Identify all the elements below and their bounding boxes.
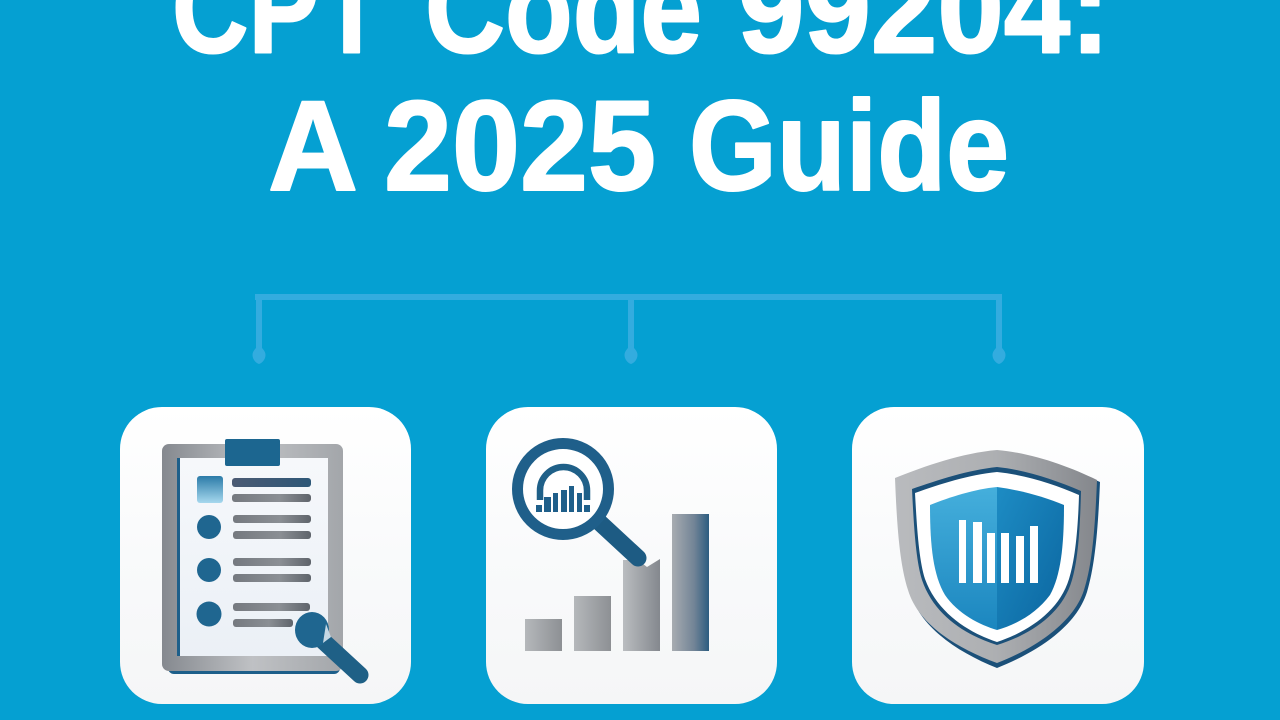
checklist row 4 — [196, 602, 310, 627]
connector: branching lines to three cards — [252, 294, 1006, 364]
shield bar graph — [959, 520, 1038, 583]
icon: large magnifier — [518, 444, 638, 558]
icon: clipboard — [162, 439, 360, 675]
checklist row 2 — [197, 515, 311, 539]
checklist row 3 — [197, 558, 311, 582]
icon: small magnifier — [295, 612, 360, 675]
card: bar chart with magnifier — [486, 407, 777, 704]
card: clipboard checklist — [120, 407, 411, 704]
title — [172, 0, 1110, 218]
checklist row 1 — [197, 476, 311, 503]
title: Guide — [689, 75, 1009, 218]
icon: shield — [895, 450, 1100, 668]
card: security shield — [852, 407, 1144, 704]
title: 2025 — [384, 75, 656, 218]
title: A — [268, 75, 358, 218]
bar chart — [525, 514, 709, 651]
